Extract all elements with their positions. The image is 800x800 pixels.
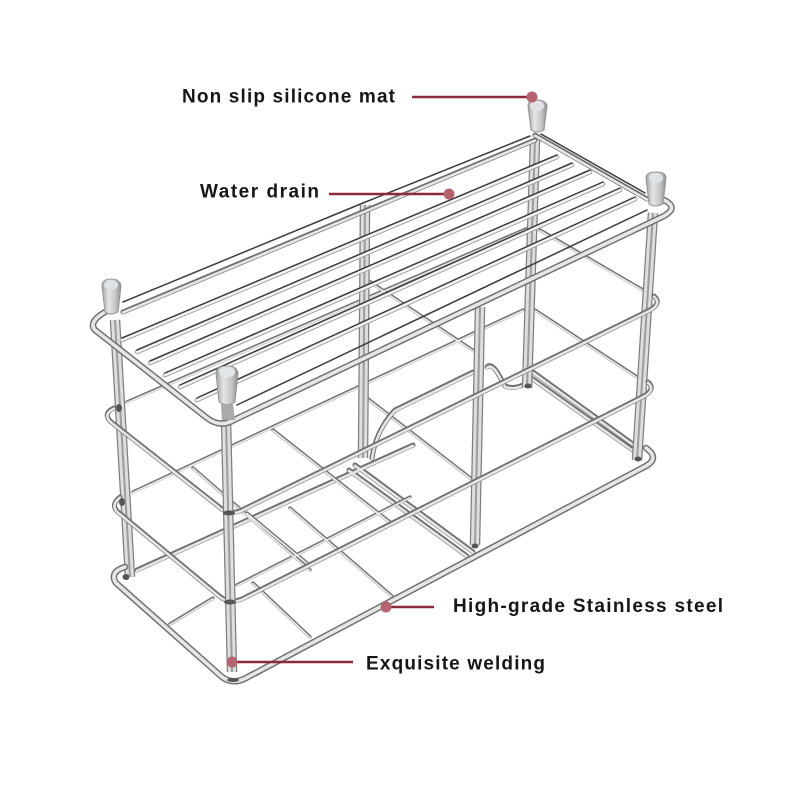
icon: foot cap front <box>216 366 238 420</box>
rack: rear level wires <box>127 225 643 571</box>
callout: water drain: Water drain <box>200 182 319 202</box>
callout: exquisite welding: Exquisite welding <box>366 654 545 674</box>
rack: top shelf back rails <box>123 134 647 405</box>
callout: non slip silicone mat <box>182 86 538 108</box>
rack: base grid wires <box>170 430 410 638</box>
rack: weld joints <box>116 384 642 682</box>
callout: exquisite welding <box>226 654 545 674</box>
icon: foot cap right <box>646 172 666 206</box>
callout: water drain <box>200 182 454 202</box>
icon: foot cap back <box>528 100 547 132</box>
callout: non slip silicone mat: Non slip silicone mat <box>182 86 396 108</box>
rack: rear and side posts <box>115 140 653 577</box>
rack: top shelf slats <box>122 155 635 400</box>
rack: base frame <box>114 448 653 681</box>
callout: high-grade stainless steel: High-grade Stainless steel <box>453 596 723 617</box>
rack: top shelf front frame <box>93 200 672 424</box>
rack: front corner post <box>226 420 232 672</box>
icon: foot cap back left <box>102 279 121 314</box>
rack: middle ring wires <box>107 296 657 602</box>
